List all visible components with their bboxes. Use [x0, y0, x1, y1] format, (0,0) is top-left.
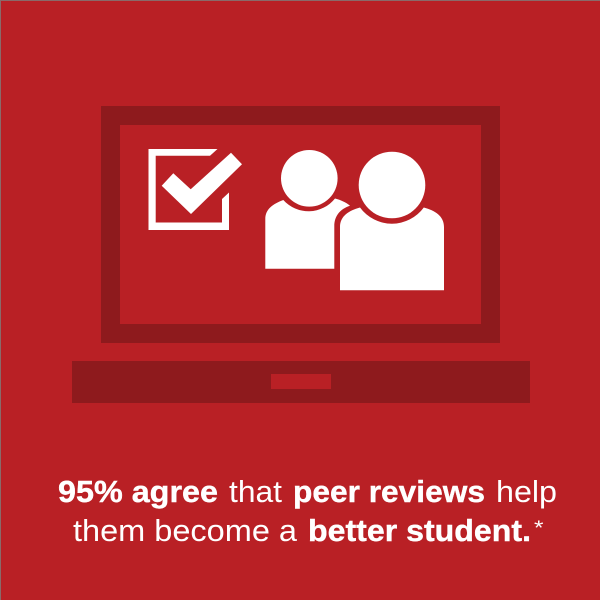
caption line 2: them become a — [73, 513, 298, 548]
caption line 2: * — [534, 518, 544, 540]
caption line 1 — [58, 474, 557, 509]
canvas edge line: left — [0, 0, 1, 600]
checkbox outline — [148, 149, 229, 230]
icon: laptop — [72, 106, 530, 403]
caption text — [58, 474, 557, 548]
laptop screen frame — [101, 106, 500, 343]
laptop base — [72, 361, 530, 403]
canvas edge line: top — [0, 0, 600, 1]
laptop trackpad notch — [271, 374, 331, 389]
icon: two people — [265, 150, 444, 290]
caption line 2: better student. — [308, 513, 531, 548]
icon: checked checkbox — [148, 149, 242, 230]
caption line 1: peer reviews — [293, 474, 485, 509]
caption line 1: 95% agree — [58, 474, 218, 509]
caption line 2 — [73, 513, 544, 548]
person back — [265, 150, 350, 269]
caption line 1: help — [496, 474, 557, 509]
person front — [340, 152, 444, 290]
check mark — [162, 153, 242, 214]
caption line 1: that — [229, 474, 282, 509]
